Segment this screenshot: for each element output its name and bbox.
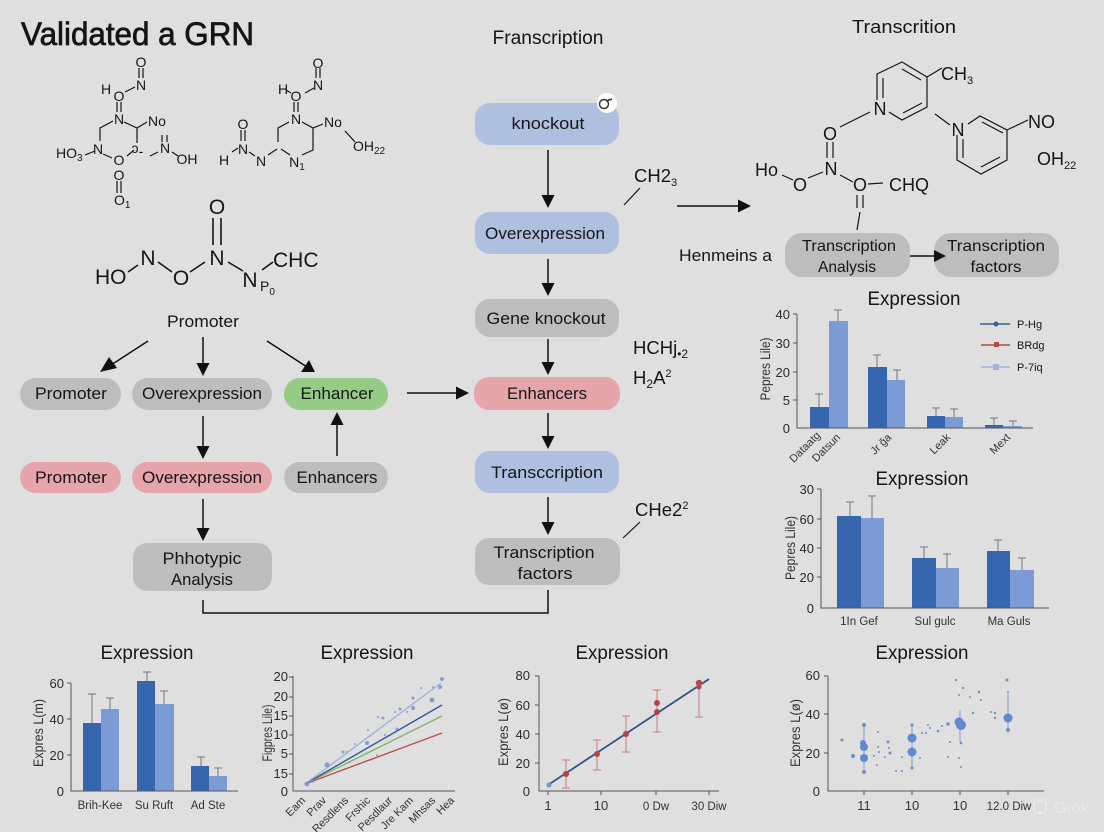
heading: right column: Transcrition <box>852 16 956 37</box>
y axis label: Figpres Lile) <box>260 704 275 762</box>
molecule: top left structure: O <box>114 88 125 104</box>
y axis ticks: 15 <box>274 708 288 723</box>
molecule: top left structure: 1 <box>125 200 131 211</box>
molecule: top centre-left structure: O <box>238 116 249 132</box>
arrow: analysis to factors <box>910 250 946 262</box>
arrow: to right structure <box>677 200 751 212</box>
pill: enhancers gray <box>284 462 388 493</box>
x labels: 1In Gef <box>840 616 879 628</box>
x labels: Jr ğa <box>868 431 895 457</box>
molecule: right structure: O <box>823 124 837 144</box>
y axis ticks: 0 <box>281 784 288 799</box>
y axis label: Expres L(m) <box>31 699 46 767</box>
molecule: top centre-left structure: H <box>219 152 229 168</box>
box: phenotypic analysis: Phhotypic <box>162 549 242 568</box>
y axis ticks: 20 <box>800 570 814 585</box>
arrow: promoter to enhancer <box>267 341 315 372</box>
scatter points <box>304 677 444 786</box>
x labels: Su Ruft <box>135 800 174 812</box>
box: transcription: Transccription <box>491 463 603 482</box>
x labels: 10 <box>953 798 967 813</box>
y axis ticks: 20 <box>274 689 288 704</box>
x labels: 10 <box>594 798 608 813</box>
chart: multi-line trend, bottom <box>260 643 458 832</box>
pill: overexpression gray <box>132 378 272 410</box>
molecule: top left structure: ͻ <box>132 140 138 156</box>
small points <box>840 678 1010 774</box>
y axis label: Pepres Lile) <box>758 338 773 400</box>
molecule: right structure: CH <box>941 64 967 84</box>
formula labels beside central column: A <box>653 367 666 388</box>
x labels: 0 Dw <box>643 801 670 813</box>
x labels <box>787 430 1013 465</box>
formula labels beside central column: 3 <box>671 177 677 189</box>
formula labels beside central column: H <box>633 367 646 388</box>
molecule: right structure: Ho <box>755 160 778 180</box>
x labels <box>78 800 225 812</box>
molecule: large chain structure: P <box>260 278 269 294</box>
molecule: top centre-left structure: N <box>291 111 301 127</box>
y axis ticks: 0 <box>523 784 530 799</box>
y axis ticks: 20 <box>516 756 530 771</box>
y axis ticks: 40 <box>516 727 530 742</box>
y axis ticks <box>776 307 790 436</box>
arrow: knockout down <box>542 150 554 208</box>
legend: P-Hg <box>1017 319 1042 331</box>
y axis ticks: 20 <box>274 669 288 684</box>
formula labels beside central column: CH2 <box>634 165 671 186</box>
arrow: gene knockout down <box>542 339 554 375</box>
molecule: large chain structure: 0 <box>269 287 275 298</box>
chart title: Expression <box>100 643 194 664</box>
large points <box>860 714 1012 762</box>
trend lines <box>305 683 442 784</box>
y axis ticks: 10 <box>274 727 288 742</box>
molecule: top left structure: O <box>114 167 125 183</box>
molecule: top left structure: OH <box>176 151 198 167</box>
box: transcription analysis <box>785 233 910 277</box>
chart title: Expression <box>868 289 960 310</box>
molecule: right structure <box>755 62 1076 230</box>
x labels: Jre Kam <box>379 795 416 832</box>
box: knockout <box>475 103 619 145</box>
molecule: large chain structure: O <box>173 267 189 290</box>
box: transcription analysis: Transcription <box>802 238 896 255</box>
pill: overexpression gray: Overexpression <box>142 384 262 403</box>
pill: enhancer green: Enhancer <box>300 384 374 403</box>
y axis ticks: 60 <box>806 668 820 683</box>
molecule: top left structure: No <box>148 113 166 129</box>
box: enhancers: Enhancers <box>507 384 587 403</box>
chart: grouped bars, right middle <box>783 469 1049 628</box>
molecule: right structure: N <box>952 120 964 140</box>
box: gene knockout: Gene knockout <box>486 309 606 328</box>
x labels <box>284 794 458 832</box>
formula labels beside central column: 2 <box>682 500 688 512</box>
x labels: Ma Guls <box>988 616 1031 628</box>
formula labels beside central column: 2 <box>665 368 672 380</box>
y axis ticks <box>516 668 530 799</box>
x labels: Leak <box>928 431 953 457</box>
trend line <box>548 679 709 785</box>
y axis ticks: 20 <box>50 748 64 763</box>
molecule: right structure: 3 <box>967 75 973 87</box>
y axis ticks: 0 <box>57 784 64 799</box>
x labels: Dataatg <box>787 430 823 465</box>
molecule: top centre-left structure: N <box>238 141 248 157</box>
chart title: Expression <box>320 643 414 664</box>
box: transcription factors: Transcription <box>494 543 594 562</box>
x labels: Frshic <box>343 794 373 824</box>
bars <box>810 321 1022 428</box>
molecule: right structure: 22 <box>1064 160 1076 172</box>
label: henmeins a: Henmeins a <box>679 246 773 265</box>
arrow: promoter to overexpression <box>196 337 210 376</box>
molecule: top centre-left structure: N <box>289 154 299 170</box>
molecule: top centre-left structure: H <box>278 81 288 97</box>
x labels: Mhsas <box>407 794 438 826</box>
arrow: enhancers down <box>542 413 554 449</box>
y axis ticks <box>50 676 64 799</box>
legend: P-7iq <box>1017 362 1043 374</box>
molecule: top left structure: N <box>136 77 146 93</box>
y axis ticks: 0 <box>813 784 820 799</box>
y axis ticks: 60 <box>800 512 814 527</box>
x labels <box>857 798 1032 813</box>
x labels: Eam <box>284 795 308 819</box>
pill: overexpression red: Overexpression <box>142 468 262 487</box>
flow: central validation column <box>474 28 620 585</box>
molecule: top left structure: N <box>160 140 170 156</box>
molecule: right structure: NO <box>1028 112 1055 132</box>
molecule: top centre-left structure: N <box>313 77 323 93</box>
y axis ticks: 30 <box>800 482 814 497</box>
molecule: top centre-left structure: OH <box>353 138 374 154</box>
box: transcription <box>475 451 619 493</box>
formula labels beside central column: •2 <box>677 347 688 361</box>
x labels: Ad Ste <box>191 800 225 812</box>
molecule: top centre-left structure: 1 <box>299 162 305 173</box>
formula labels beside central column: HCHj <box>633 337 677 358</box>
y axis ticks: 40 <box>776 307 790 322</box>
molecule: large chain structure: N <box>209 247 225 270</box>
x labels: 11 <box>857 798 871 813</box>
chart: scatter, bottom right <box>788 643 1044 813</box>
y axis ticks: 80 <box>516 668 530 683</box>
molecule: right structure: CHQ <box>889 175 929 195</box>
molecule: top left structure: 3 <box>77 153 83 164</box>
arrow: overexpression down <box>542 259 554 296</box>
x labels <box>544 798 727 813</box>
box: gene knockout <box>475 299 619 337</box>
molecule: large chain structure <box>95 196 318 298</box>
molecule: top left structure: N <box>93 141 103 157</box>
pill: promoter red <box>20 462 121 493</box>
molecule: large chain structure: N <box>242 269 258 292</box>
molecule: right structure: N <box>874 99 886 119</box>
connector: phenotypic analysis to transcription factors <box>203 590 548 613</box>
molecule: large chain structure: HO <box>95 266 126 289</box>
x labels: Brih-Kee <box>78 800 122 812</box>
molecule: top left structure: H <box>101 81 111 97</box>
chart: grouped bars with legend, right top <box>758 289 1045 465</box>
box: phenotypic analysis <box>133 543 272 591</box>
chart title: Expression <box>876 469 968 490</box>
x labels: Prav <box>305 794 329 819</box>
molecule: top left structure: O <box>136 54 147 70</box>
error lines <box>864 692 1008 772</box>
molecule: top left structure: HO <box>56 145 77 161</box>
legend: BRdg <box>1017 340 1045 352</box>
y axis ticks: 40 <box>806 707 820 722</box>
box: knockout: knockout <box>512 114 585 133</box>
formula labels beside central column <box>623 165 688 538</box>
arrow: promoter to promoter <box>100 341 148 372</box>
data points <box>546 680 702 788</box>
molecule: top left structure: - <box>139 143 144 159</box>
label: promoter root: Promoter <box>167 312 239 331</box>
legend <box>980 319 1045 374</box>
title: Validated a GRN <box>21 16 254 52</box>
box: transcription factors right: Transcription <box>947 238 1045 255</box>
y axis ticks: 40 <box>50 712 64 727</box>
watermark <box>1034 800 1090 817</box>
chart title: Expression <box>576 643 668 664</box>
x labels <box>840 616 1031 628</box>
y axis ticks <box>274 669 288 799</box>
pill: promoter gray <box>20 378 121 410</box>
pill: promoter red: Promoter <box>35 468 107 487</box>
bars <box>837 516 1034 608</box>
chart: line with error bars, bottom <box>496 643 727 813</box>
x labels: Sul gulc <box>915 616 956 628</box>
molecule: top centre-left structure: O <box>291 88 302 104</box>
box: transcription factors right <box>934 233 1059 277</box>
bars <box>83 681 227 791</box>
molecule: top left structure <box>56 54 198 211</box>
y axis ticks <box>800 482 814 616</box>
y axis label: Expres L(ø) <box>496 698 511 766</box>
molecule: top centre-left structure: O <box>313 55 324 71</box>
y axis ticks: 30 <box>776 336 790 351</box>
pill: overexpression red <box>132 462 272 493</box>
watermark: Grok <box>1054 800 1090 817</box>
molecule: top left structure: O <box>114 192 125 208</box>
y axis ticks: 20 <box>806 746 820 761</box>
molecule: right structure: OH <box>1037 149 1064 169</box>
x labels: Datsun <box>810 432 843 465</box>
arrow: enhancer to enhancers <box>407 386 469 400</box>
pill: enhancer green <box>284 378 388 410</box>
formula labels beside central column: 2 <box>646 377 653 391</box>
box: overexpression <box>475 212 619 254</box>
molecule: right structure: O <box>853 175 867 195</box>
y axis ticks: 0 <box>783 421 790 436</box>
y axis ticks: 20 <box>776 365 790 380</box>
box: transcription analysis: Analysis <box>818 259 876 276</box>
arrow: to phenotypic analysis <box>196 499 210 541</box>
x labels: Mext <box>988 432 1013 457</box>
molecule: right structure: N <box>824 159 838 179</box>
y axis ticks: 5 <box>281 746 288 761</box>
box: transcription factors: factors <box>518 564 572 583</box>
error bars <box>562 685 703 788</box>
arrow: enhancers up <box>330 412 344 456</box>
formula labels beside central column: CHe2 <box>635 499 682 520</box>
flow: left gene network <box>20 312 388 591</box>
y axis label: Expres L(ø) <box>788 699 803 767</box>
y axis ticks <box>806 668 820 799</box>
y axis label: Pepres Lile) <box>783 516 798 580</box>
molecule: top centre-left structure: No <box>324 114 342 130</box>
molecule: large chain structure: CHC <box>273 249 318 272</box>
y axis ticks: 15 <box>274 766 288 781</box>
y axis ticks: 40 <box>800 541 814 556</box>
box: enhancers <box>474 377 620 410</box>
molecule: large chain structure: N <box>140 247 156 270</box>
box: transcription factors <box>475 538 620 585</box>
box: phenotypic analysis: Analysis <box>171 570 233 589</box>
y axis ticks: 60 <box>50 676 64 691</box>
molecule: right structure: O <box>793 175 807 195</box>
pill: enhancers gray: Enhancers <box>296 468 378 487</box>
arrow: overexpression down <box>196 416 210 459</box>
box: overexpression: Overexpression <box>485 224 605 243</box>
x labels: 12.0 Diw <box>987 801 1032 813</box>
arrow: transcription down <box>542 497 554 535</box>
icon: badge <box>597 93 617 113</box>
y axis ticks: 5 <box>783 393 790 408</box>
molecule: large chain structure: O <box>209 196 225 219</box>
molecule: top left structure: O <box>114 152 125 168</box>
chart title: Expression <box>876 643 968 664</box>
pill: promoter gray: Promoter <box>35 384 107 403</box>
molecule: top left structure: N <box>114 111 124 127</box>
chart: grouped bars, bottom left <box>31 643 238 812</box>
y axis ticks: 60 <box>516 698 530 713</box>
y axis ticks: 0 <box>807 601 814 616</box>
molecule: top centre-left structure: N <box>256 153 266 169</box>
box: transcription factors right: factors <box>970 259 1022 276</box>
x labels: 10 <box>905 798 919 813</box>
heading: central column: Franscription <box>492 28 604 49</box>
molecule: top centre-left structure: 22 <box>374 146 386 157</box>
molecule: top centre-left structure <box>219 55 386 173</box>
x labels: 1 <box>544 798 552 813</box>
x labels: 30 Diw <box>691 801 727 813</box>
x labels: Hea <box>434 794 458 817</box>
